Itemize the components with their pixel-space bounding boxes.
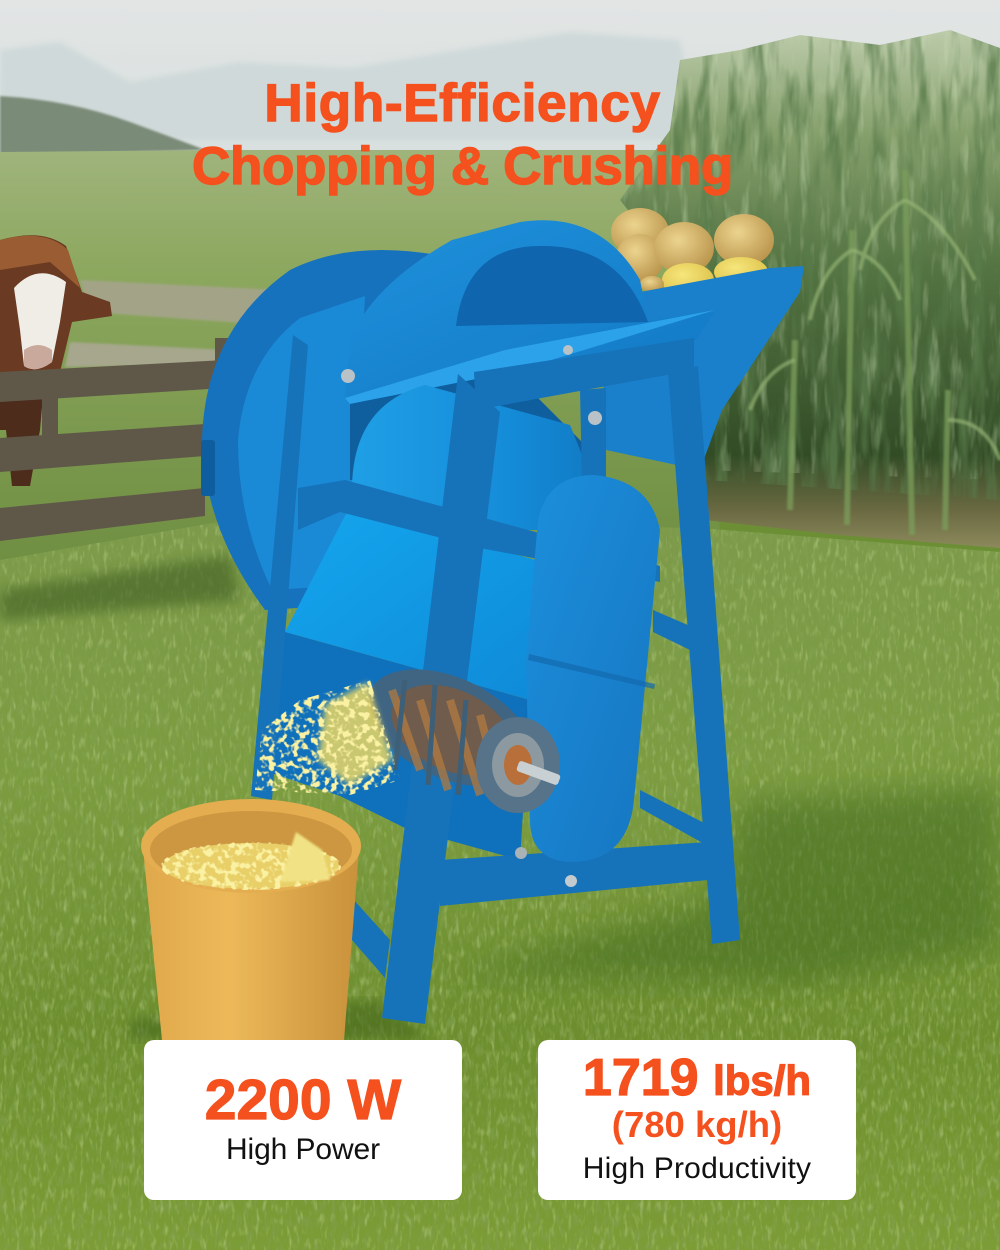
productivity value: 1719 lbs/h [583,1049,811,1107]
crushed corn stream [255,680,400,795]
feed opening [456,246,648,326]
power value: 2200 W [205,1068,401,1132]
upper feed cover [345,220,715,398]
road [80,280,280,325]
sky [0,0,1000,160]
output chute [285,510,536,700]
round drum housing [202,250,437,610]
title [192,74,733,196]
distant mountains [0,32,700,140]
frame [251,335,740,1024]
left hill [0,96,205,156]
lawn shadows [0,555,240,620]
wooden fence [0,338,233,541]
cow [0,235,112,486]
productivity label: High Productivity [583,1152,811,1185]
field [0,150,720,560]
power label: High Power [226,1133,380,1166]
card: 2200 W high power [144,1040,462,1200]
metric productivity value: (780 kg/h) [612,1104,782,1145]
underside shadow [350,372,600,480]
potatoes [611,208,774,297]
belt guard [526,475,660,862]
title: High-Efficiency [264,74,661,133]
corn crop [620,30,1000,548]
feed bucket [141,799,361,1040]
lower lawn [0,520,1000,1250]
title: Chopping & Crushing [192,137,733,196]
hopper tray at back [600,266,804,470]
machine [201,208,804,1024]
motor cylinder [350,385,612,530]
bolts [341,369,355,383]
transparent motor cutaway [349,645,561,813]
card: 1719 lbs/h high productivity [538,1040,856,1200]
